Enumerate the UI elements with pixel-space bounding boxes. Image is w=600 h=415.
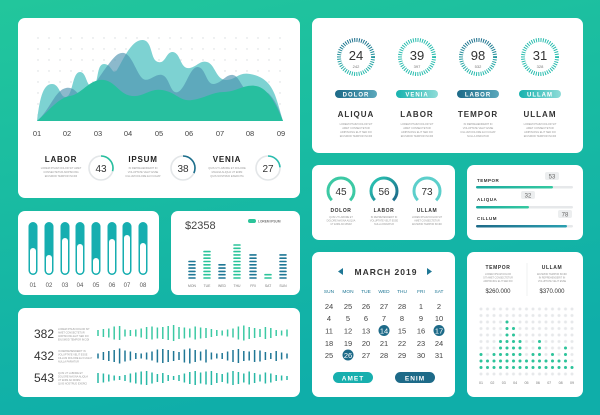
gauge 73: EIUSMOD TEMPOR INCIDI <box>412 223 442 226</box>
panel: calendar: 31 <box>435 351 443 360</box>
row 543: 543 <box>34 371 54 385</box>
panel: vertical pill bars: 07 <box>124 283 131 289</box>
gauge 56 <box>366 173 402 226</box>
panel: calendar: 19 <box>344 339 352 348</box>
stat: VENIA 27: MAGNA ALIQUA UT ENIM <box>212 170 242 174</box>
dial 39: LOREM IPSUM DOLOR SIT <box>401 122 434 126</box>
panel: equalizer chart: SAT <box>265 284 271 288</box>
progress ALIQUA 32: 32 <box>525 194 532 200</box>
dial 39: ADIPISCING ELIT SED DO <box>401 130 433 134</box>
row 382 <box>34 325 287 342</box>
panel: equalizer chart: FRI <box>250 284 256 288</box>
dot chart: 03 <box>502 381 506 385</box>
x-axis labels: 08 <box>246 129 254 138</box>
panel: vertical pill bars: 06 <box>109 283 116 289</box>
dot chart: 09 <box>570 381 574 385</box>
gauge 45: QUIS UT LABORE ET <box>329 216 353 219</box>
panel: calendar: 13 <box>362 326 370 336</box>
panel: calendar: 14 <box>380 326 388 336</box>
button AMET: AMET <box>342 376 364 382</box>
panel: equalizer chart: SUN <box>279 284 287 288</box>
button ENIM <box>395 372 435 383</box>
gauge 73: AMET CONSECTETUR <box>414 220 440 222</box>
row 432: NULLA PARIATUR <box>58 360 79 364</box>
gauge 56: LABOR <box>374 208 394 214</box>
panel: calendar: FRI <box>417 289 425 295</box>
progress CILLUM 78 <box>476 210 573 228</box>
panel: calendar: 26 <box>344 351 352 360</box>
panel: progress bars <box>467 165 583 240</box>
gauge 45: DOLORE MAGNA ALIQUA <box>327 220 356 222</box>
panel: calendar: WED <box>378 289 390 295</box>
dial 98: VOLUPTATE VELIT ESSE <box>463 126 494 130</box>
panel: calendar: 29 <box>398 351 406 360</box>
stat: IPSUM 38: IPSUM <box>128 155 158 164</box>
calendar header <box>338 267 432 277</box>
dial 39: 39 <box>410 48 424 63</box>
row 432: CILLUM DOLORE EU FUGIAT <box>58 357 93 360</box>
gauge 45: DOLOR <box>330 208 352 214</box>
dial 98: IN REPREHENDERIT IN <box>464 122 493 126</box>
panel: calendar: 21 <box>380 339 388 348</box>
row 543: QUIS UT LABORE ET <box>58 372 83 375</box>
x-axis labels: 02 <box>63 129 71 138</box>
panel: wave chart <box>18 18 300 198</box>
dot chart: 08 <box>559 381 563 385</box>
dial 24: DOLOR <box>343 92 369 98</box>
x-axis labels: 04 <box>124 129 132 138</box>
progress TEMPOR 53: 53 <box>549 174 556 180</box>
panel: calendar: 5 <box>346 314 350 323</box>
gauge 45 <box>323 173 359 226</box>
progress CILLUM 78: CILLUM <box>477 216 497 221</box>
row 543 <box>34 371 287 386</box>
dial 98: 98 <box>471 48 485 63</box>
dial 98: 532 <box>475 64 482 69</box>
row 543: QUIS NOSTRUD EXERCI <box>58 382 87 386</box>
header TEMPOR: TEMPOR <box>486 265 510 271</box>
panel: calendar: 15 <box>398 326 406 336</box>
dial 24: EIUSMOD TEMPOR INCIDI <box>340 134 372 138</box>
panel: vertical pill bars: 05 <box>93 283 100 289</box>
dial 39: VENIA <box>405 92 429 98</box>
dot chart: 05 <box>524 381 528 385</box>
header TEMPOR <box>483 265 513 295</box>
gauge 56: 56 <box>378 187 390 198</box>
dot chart <box>478 306 575 385</box>
row 432 <box>34 348 287 364</box>
panel: equalizer chart: THU <box>234 284 241 288</box>
calendar header: MARCH 2019 <box>355 267 417 277</box>
panel: vertical pill bars <box>18 211 159 295</box>
x-axis labels: 03 <box>94 129 102 138</box>
dial 39: 397 <box>414 64 421 69</box>
panel: calendar: 25 <box>344 302 352 311</box>
header TEMPOR: SIT AMET CONSECTETUR <box>483 276 513 280</box>
stat: VENIA 27 <box>208 155 280 180</box>
panel: vertical pill bars: 08 <box>140 283 147 289</box>
header TEMPOR: LOREM IPSUM DOLOR <box>485 273 511 276</box>
panel: calendar: 11 <box>325 326 333 336</box>
stat: LABOR 43: 43 <box>95 164 107 175</box>
dial 24 <box>335 40 377 138</box>
dial 24: AMET CONSECTETUR <box>342 126 370 130</box>
panel: calendar: 7 <box>382 314 386 323</box>
row 543: UT ENIM AD MINIM <box>58 379 80 382</box>
row 432: IN REPREHENDERIT IN <box>58 350 86 353</box>
panel: vertical pill bars: 02 <box>46 283 53 289</box>
panel: calendar: 30 <box>417 351 425 360</box>
progress CILLUM 78: 78 <box>562 212 569 218</box>
progress ALIQUA 32 <box>476 191 573 208</box>
header ULLAM <box>537 265 567 295</box>
dial 98: CILLUM DOLORE EU FUGIAT <box>460 130 496 134</box>
stat: IPSUM 38: 38 <box>177 164 189 175</box>
button AMET <box>333 372 373 383</box>
x-axis labels: 06 <box>185 129 193 138</box>
panel: equalizer chart: $2358 <box>185 220 216 232</box>
stat: IPSUM 38: CILLUM DOLORE EU FUGIAT <box>125 174 161 178</box>
x-axis labels: 09 <box>277 129 285 138</box>
panel: calendar: 16 <box>417 326 425 336</box>
gauge 56: VOLUPTATE VELIT ESSE <box>370 220 398 222</box>
gauge 73: ULLAM <box>417 208 437 214</box>
dial 39: AMET CONSECTETUR <box>403 126 431 130</box>
header ULLAM: EIUSMOD TEMPOR INCIDI <box>537 273 567 276</box>
dial 31: AMET CONSECTETUR <box>526 126 554 130</box>
progress TEMPOR 53: TEMPOR <box>477 178 500 183</box>
panel: gauges <box>312 165 455 240</box>
panel: calendar: 1 <box>419 302 423 311</box>
dial 31: EIUSMOD TEMPOR INCIDI <box>524 134 556 138</box>
panel: vertical pill bars: 03 <box>62 283 69 289</box>
progress ALIQUA 32: ALIQUA <box>477 197 497 202</box>
header ULLAM: VOLUPTATE VELIT ESSE <box>538 280 566 283</box>
row 432: 432 <box>34 349 54 363</box>
x-axis labels: 05 <box>155 129 163 138</box>
panel: calendar: 27 <box>380 302 388 311</box>
panel: calendar: 25 <box>325 351 333 360</box>
panel: calendar: 23 <box>417 339 425 348</box>
panel: calendar: 28 <box>398 302 406 311</box>
header TEMPOR: $260.000 <box>485 289 511 295</box>
panel: calendar: 28 <box>380 351 388 360</box>
row 382: EIUSMOD TEMPOR INCIDI <box>58 338 90 342</box>
button ENIM: ENIM <box>405 376 425 382</box>
dial 39: LABOR <box>400 110 434 119</box>
stat: IPSUM 38: IN REPREHENDERIT IN <box>129 166 158 170</box>
panel: calendar: SUN <box>324 289 335 295</box>
dot chart: 07 <box>547 381 551 385</box>
stat: IPSUM 38 <box>125 155 195 180</box>
gauge 45: UT ENIM AD MINIM <box>330 223 352 226</box>
gauge 56: NULLA PARIATUR <box>374 223 394 226</box>
dial 24: ALIQUA <box>338 110 374 119</box>
gauge 56: IN REPREHENDERIT IN <box>371 216 398 219</box>
stat: VENIA 27: QUIS NOSTRUD EXERCITA <box>210 174 244 178</box>
x-axis labels: 07 <box>216 129 224 138</box>
panel: equalizer chart: TUE <box>204 284 211 288</box>
dot chart: 04 <box>513 381 517 385</box>
panel: calendar: SAT <box>435 289 444 295</box>
panel: equalizer chart: WED <box>218 284 227 288</box>
stat: LABOR 43: LOREM IPSUM DOLOR SIT AMET <box>41 166 82 170</box>
panel: dial rings <box>312 18 583 153</box>
dial 24: 242 <box>353 64 360 69</box>
panel: calendar: 27 <box>362 351 370 360</box>
dot chart: 02 <box>490 381 494 385</box>
stat: LABOR 43: EIUSMOD TEMPOR INCIDI <box>45 174 77 178</box>
dial 98: NULLA PARIATUR <box>467 134 489 138</box>
stat: VENIA 27: 27 <box>262 164 274 175</box>
panel: calendar: 22 <box>398 339 406 348</box>
dial 24: LOREM IPSUM DOLOR SIT <box>340 122 373 126</box>
panel: calendar: THU <box>397 289 407 295</box>
panel: equalizer chart: MON <box>188 284 197 288</box>
legend: LOREM IPSUM <box>258 220 281 224</box>
stat: LABOR 43 <box>41 155 113 180</box>
panel: calendar: TUE <box>361 289 371 295</box>
x-axis labels <box>33 129 285 138</box>
x-axis labels: 01 <box>33 129 41 138</box>
highlighted days <box>342 325 444 360</box>
row 543: DOLORE MAGNA ALIQUA <box>58 376 88 378</box>
panel: bar waveforms <box>18 308 300 397</box>
dot chart: 01 <box>479 381 483 385</box>
panel: calendar: 10 <box>435 314 443 323</box>
gauge 73: LOREM IPSUM DOLOR SIT <box>412 216 443 219</box>
dial 31: ULLAM <box>524 110 556 119</box>
panel: equalizer chart <box>171 211 300 295</box>
header ULLAM: $370.000 <box>539 289 565 295</box>
dial 31: ULLAM <box>527 92 553 98</box>
header ULLAM: ULLAM <box>542 265 562 271</box>
panel: calendar: 17 <box>435 326 443 336</box>
progress TEMPOR 53 <box>476 172 573 188</box>
dot chart: 06 <box>536 381 540 385</box>
panel: calendar: 20 <box>362 339 370 348</box>
gauge 73 <box>409 173 445 226</box>
row 382: ADIPISCING ELIT SED DO <box>58 335 89 338</box>
panel: calendar: 18 <box>325 339 333 348</box>
dial 39: EIUSMOD TEMPOR INCIDI <box>401 134 433 138</box>
header ULLAM: IN REPREHENDERIT IN <box>539 276 566 280</box>
panel: calendar: 9 <box>419 314 423 323</box>
row 432: VOLUPTATE VELIT ESSE <box>58 354 88 356</box>
gauge 73: 73 <box>421 187 433 198</box>
panel: calendar: 24 <box>435 339 443 348</box>
dial 24: ADIPISCING ELIT SED DO <box>340 130 372 134</box>
stat: VENIA 27: VENIA <box>213 155 241 164</box>
header TEMPOR: ADIPISCING ELIT SED DO <box>483 280 513 283</box>
panel: calendar: 6 <box>364 314 368 323</box>
panel: calendar: 2 <box>437 302 441 311</box>
panel: calendar: 26 <box>362 302 370 311</box>
panel: calendar <box>312 252 455 397</box>
row 382: LOREM IPSUM DOLOR SIT <box>58 328 90 331</box>
dial 24: 24 <box>349 48 363 63</box>
dial 31: LOREM IPSUM DOLOR SIT <box>524 122 557 126</box>
stat: VENIA 27: QUIS UT LABORE ET DOLORE <box>208 166 246 170</box>
dial 98: TEMPOR <box>458 110 498 119</box>
dial 98: LABOR <box>465 92 491 98</box>
panel: calendar: 12 <box>344 326 352 336</box>
stat: LABOR 43: CONSECTETUR ADIPISCING <box>43 170 79 174</box>
row 382: AMET CONSECTETUR <box>58 332 85 334</box>
panel: calendar: MON <box>342 289 354 295</box>
dial 31: 31 <box>533 48 547 63</box>
panel: calendar: 4 <box>327 314 331 323</box>
panel: vertical pill bars: 04 <box>77 283 84 289</box>
panel: vertical pill bars: 01 <box>30 283 37 289</box>
dial 98 <box>457 40 499 138</box>
dial 39 <box>396 40 438 138</box>
row 382: 382 <box>34 327 54 341</box>
dial 31: ADIPISCING ELIT SED DO <box>524 130 556 134</box>
panel: dot matrix <box>467 252 583 397</box>
dial 31: 328 <box>537 64 544 69</box>
dial 31 <box>519 40 561 138</box>
stat: LABOR 43: LABOR <box>45 155 77 164</box>
panel: calendar: 24 <box>325 302 333 311</box>
panel: calendar: 8 <box>400 314 404 323</box>
gauge 45: 45 <box>335 187 347 198</box>
stat: IPSUM 38: VOLUPTATE VELIT ESSE <box>128 170 159 174</box>
area chart <box>37 40 283 121</box>
